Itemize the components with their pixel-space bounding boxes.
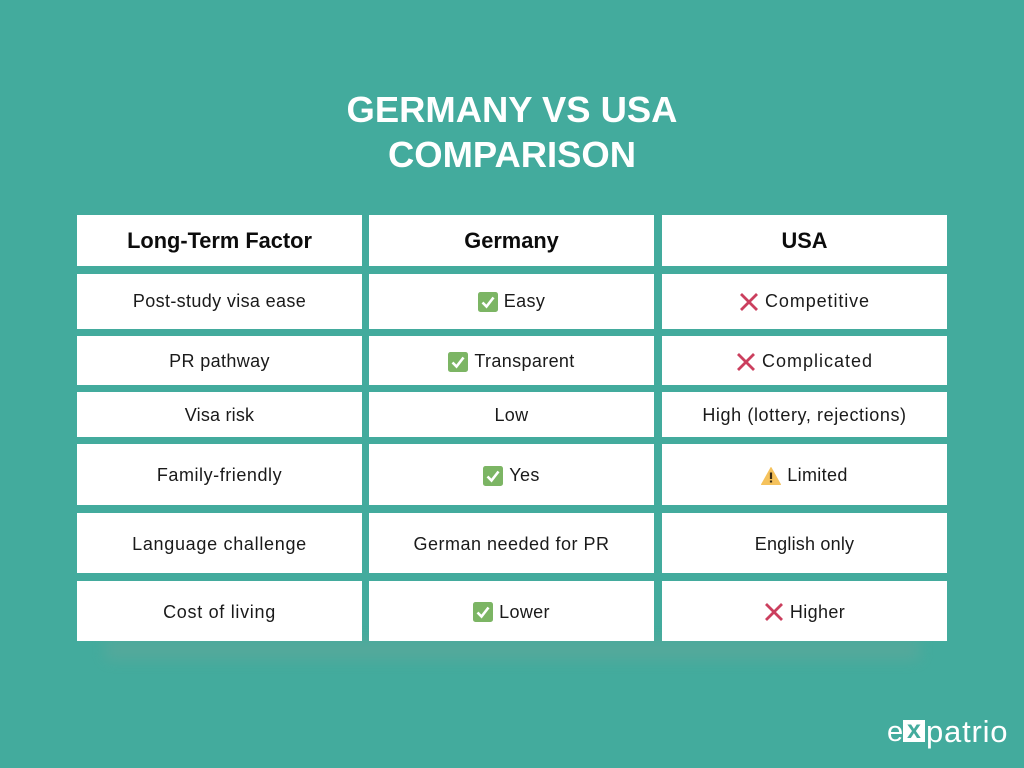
cell: German needed for PR: German needed for PR: [413, 534, 610, 554]
row: Language challenge: [77, 513, 362, 573]
cell: German needed for PR: [369, 513, 654, 573]
cell: Transparent: Transparent: [474, 351, 575, 371]
row: Post-study visa ease: Post-study visa ease: [133, 291, 306, 311]
row: Visa risk: Visa risk: [185, 405, 254, 425]
cell: Easy: Easy: [504, 291, 545, 311]
cell: English only: English only: [755, 534, 854, 554]
header: Germany: Germany: [464, 228, 559, 253]
header: USA: [662, 215, 947, 266]
row: PR pathway: PR pathway: [169, 351, 270, 371]
header: Germany: [369, 215, 654, 266]
row: Language challenge: Language challenge: [132, 534, 307, 554]
cell: Low: [369, 392, 654, 437]
row: Family-friendly: Family-friendly: [157, 465, 282, 485]
cell: Higher: [662, 581, 947, 641]
cell: Yes: Yes: [509, 465, 540, 485]
cell: Higher: Higher: [790, 602, 845, 622]
header: Long-Term Factor: Long-Term Factor: [127, 228, 312, 253]
cell: Low: Low: [494, 405, 529, 425]
cell: Lower: [369, 581, 654, 641]
cell: Complicated: Complicated: [762, 351, 873, 371]
cell: Limited: Limited: [787, 465, 848, 485]
title: COMPARISON: [388, 134, 636, 175]
row: Post-study visa ease: [77, 274, 362, 329]
cell: High: High (lottery, rejections): [702, 405, 907, 425]
row: Visa risk: [77, 392, 362, 437]
row: Family-friendly: [77, 444, 362, 505]
cell: High: [662, 392, 947, 437]
logo: expatrio: [887, 714, 1008, 749]
logo: expatrio: x: [907, 716, 921, 744]
cell: Lower: Lower: [499, 602, 550, 622]
logo: expatrio: e: [887, 716, 903, 748]
cell: Competitive: Competitive: [765, 291, 870, 311]
cell: Complicated: [662, 336, 947, 385]
cell: English only: [662, 513, 947, 573]
title: GERMANY VS USA: [347, 89, 677, 130]
cell: Limited: [662, 444, 947, 505]
header: USA: USA: [781, 228, 828, 253]
cell: Competitive: [662, 274, 947, 329]
row: Cost of living: Cost of living: [163, 602, 276, 622]
cell: Transparent: [369, 336, 654, 385]
row: PR pathway: [77, 336, 362, 385]
cell: Yes: [369, 444, 654, 505]
logo: expatrio: patrio: [926, 714, 1008, 749]
title: [347, 89, 677, 175]
table shadow: [105, 640, 920, 660]
cell: Easy: [369, 274, 654, 329]
header: Long-Term Factor: [77, 215, 362, 266]
row: Cost of living: [77, 581, 362, 641]
